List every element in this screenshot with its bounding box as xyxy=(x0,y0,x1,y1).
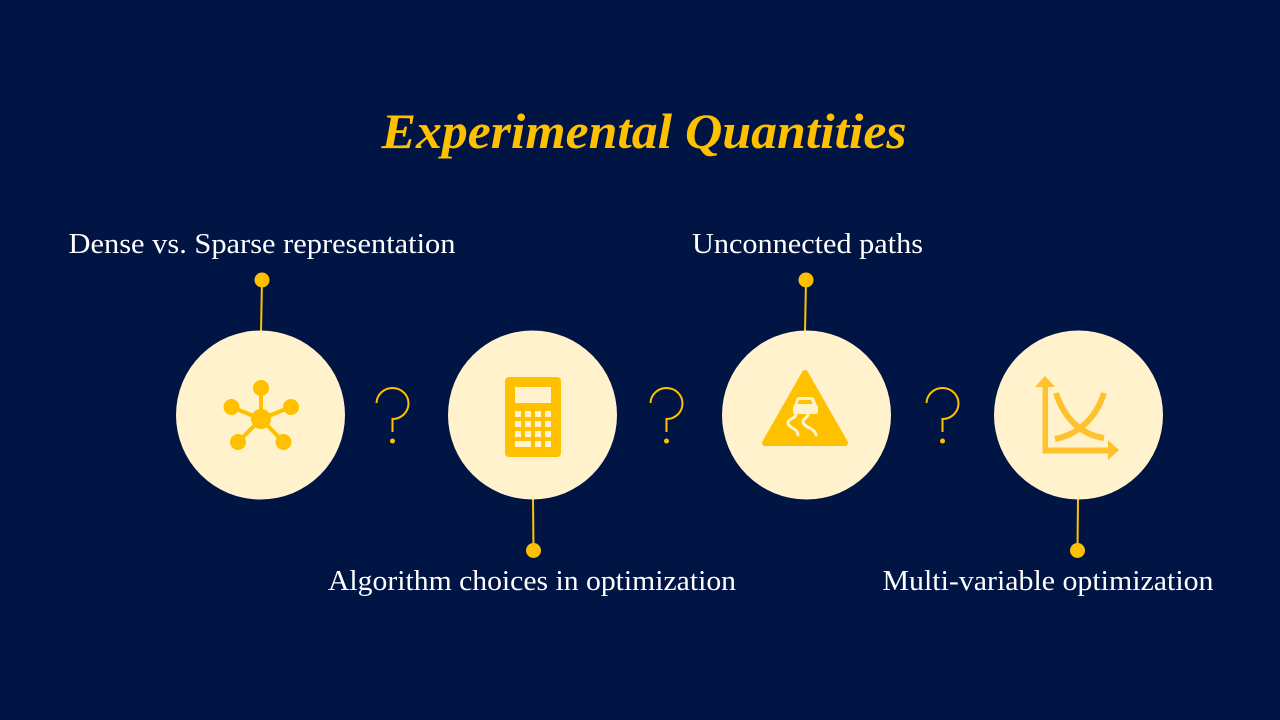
question mark 2 xyxy=(650,388,682,444)
circle: warning xyxy=(722,330,891,500)
title: Experimental Quantities xyxy=(380,103,906,159)
label: dense vs sparse: Dense vs. Sparse representation xyxy=(68,228,456,260)
icon: graph xyxy=(1035,376,1119,460)
label: multi-variable: Multi-variable optimization xyxy=(882,565,1214,597)
circle: calculator xyxy=(448,330,617,500)
icon: slippery road xyxy=(765,373,845,443)
icon: calculator xyxy=(505,377,561,457)
icon: network xyxy=(224,380,299,450)
question mark 3 xyxy=(926,388,958,444)
circle: network xyxy=(176,330,345,500)
label: algorithm choices: Algorithm choices in optimization xyxy=(328,565,737,597)
connector: multi-variable xyxy=(1070,498,1085,558)
question mark 1 xyxy=(376,388,408,444)
connector: dense vs sparse xyxy=(254,272,270,332)
connector: algorithm choices xyxy=(526,498,541,558)
label: unconnected paths: Unconnected paths xyxy=(692,228,923,260)
connector: unconnected paths xyxy=(798,272,814,332)
circle: graph xyxy=(994,330,1163,500)
